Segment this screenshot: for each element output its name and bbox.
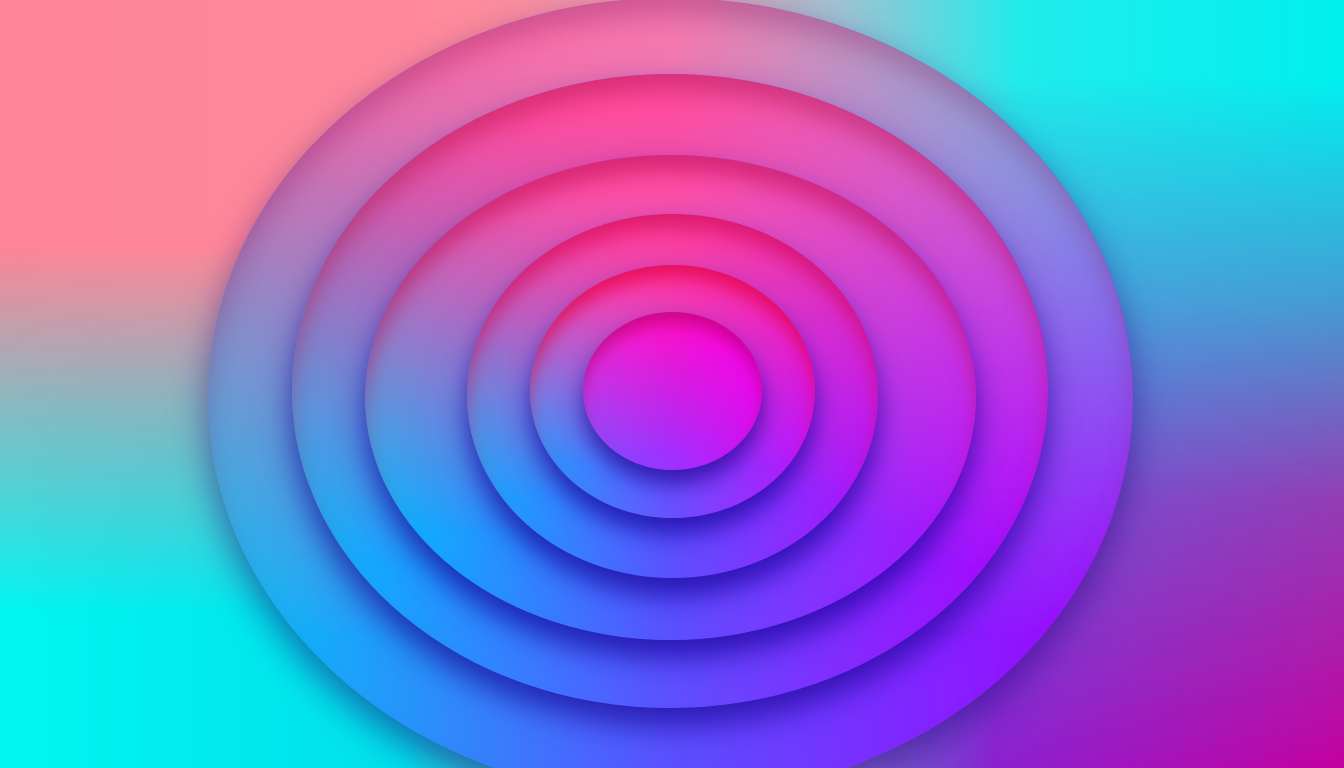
ring 1: outermost disc [208, 0, 1133, 768]
background lower-right magenta wash [846, 98, 1344, 768]
ring 2 [292, 74, 1048, 708]
ring 6: centre disc [583, 312, 762, 470]
ring 5 [530, 265, 815, 518]
ring 4 [467, 214, 878, 578]
background lower-left cyan wash [0, 257, 494, 768]
ring 3 [365, 155, 976, 640]
